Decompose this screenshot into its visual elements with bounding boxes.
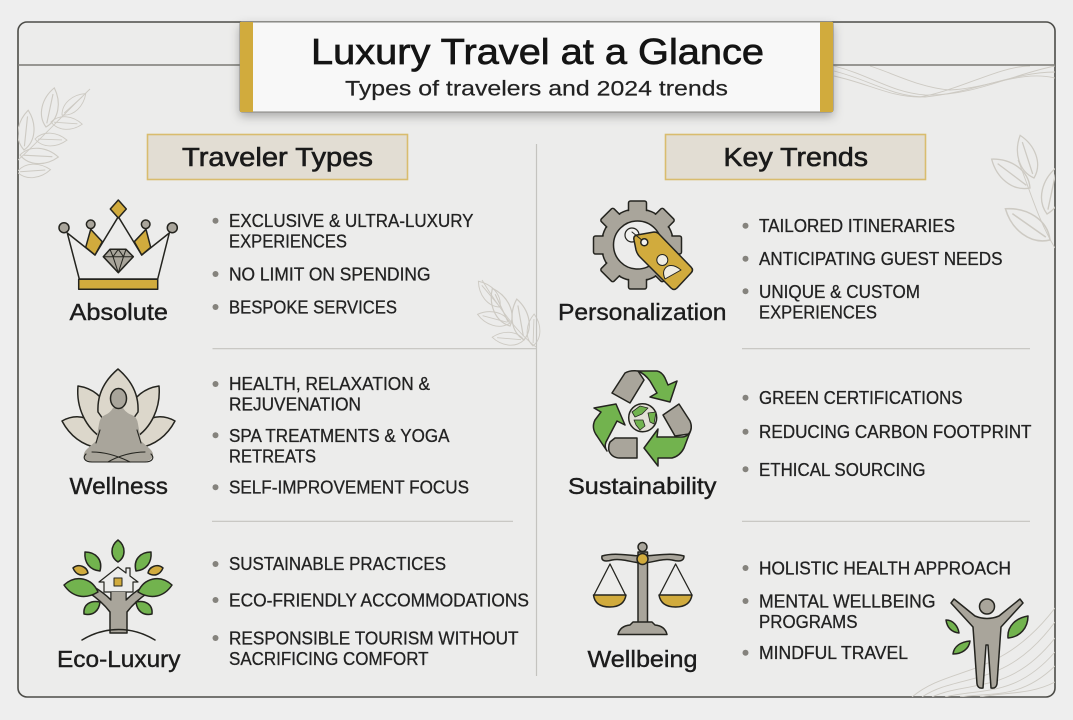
- label: Wellbeing: [588, 646, 698, 672]
- bullet list: REDUCING CARBON FOOTPRINT: [759, 422, 1032, 442]
- bullet list: SUSTAINABLE PRACTICES: [229, 554, 446, 574]
- panel: Wellness: [62, 369, 469, 499]
- bullet list: MINDFUL TRAVEL: [759, 643, 908, 663]
- decoration: top-left branch: [16, 86, 90, 179]
- bullet list: BESPOKE SERVICES: [229, 297, 397, 317]
- icon: person with leaves: [946, 599, 1028, 688]
- heading: Key Trends: [666, 134, 926, 180]
- header rule: [18, 64, 1055, 66]
- bullet list: ETHICAL SOURCING: [759, 460, 926, 480]
- decoration: bottom-right waves: [912, 608, 1055, 697]
- icon: tree house: [64, 540, 172, 640]
- panel: Absolute: [59, 200, 474, 325]
- title: Luxury Travel at a Glance: [311, 31, 764, 72]
- bullet list: [742, 388, 1032, 480]
- panel: Eco-Luxury: [57, 540, 529, 672]
- panel: Personalization: [558, 201, 1002, 325]
- icon: crown: [59, 200, 177, 289]
- bullet list: NO LIMIT ON SPENDING: [229, 264, 430, 284]
- decoration: top-right waves: [834, 66, 1055, 97]
- bullet list: TAILORED ITINERARIES: [759, 216, 955, 236]
- bullet list: [742, 558, 1011, 663]
- icon: balance scale: [594, 542, 692, 634]
- subtitle: Types of travelers and 2024 trends: [345, 76, 728, 100]
- bullet list: GREEN CERTIFICATIONS: [759, 388, 962, 408]
- panel: Wellbeing: [588, 542, 1028, 688]
- bullet list: ANTICIPATING GUEST NEEDS: [759, 249, 1002, 269]
- bullet list: REJUVENATION: [229, 394, 361, 414]
- bullet list: UNIQUE & CUSTOM: [759, 282, 920, 302]
- heading: Traveler Types: [148, 134, 408, 180]
- icon: gear and tag: [594, 201, 692, 290]
- label: Absolute: [70, 299, 168, 325]
- bullet list: [742, 216, 1002, 322]
- bullet list: [212, 374, 469, 497]
- bullet list: RESPONSIBLE TOURISM WITHOUT: [229, 628, 519, 648]
- panel: Sustainability: [568, 371, 1032, 499]
- bullet list: HEALTH, RELAXATION &: [229, 374, 430, 394]
- title banner: [240, 22, 833, 112]
- bullet list: PROGRAMS: [759, 612, 858, 632]
- label: Sustainability: [568, 473, 717, 499]
- heading: Traveler Types: Traveler Types: [182, 144, 373, 172]
- bullet list: SPA TREATMENTS & YOGA: [229, 426, 450, 446]
- icon: lotus meditation: [62, 369, 175, 462]
- bullet list: EXPERIENCES: [759, 302, 877, 322]
- label: Wellness: [70, 473, 168, 499]
- label: Personalization: [558, 299, 726, 325]
- icon: recycle and globe: [593, 371, 691, 466]
- bullet list: RETREATS: [229, 446, 316, 466]
- label: Eco-Luxury: [57, 646, 181, 672]
- decoration: right branch: [990, 134, 1055, 248]
- bullet list: EXPERIENCES: [229, 231, 347, 251]
- bullet list: EXCLUSIVE & ULTRA-LUXURY: [229, 211, 474, 231]
- decoration: centre branch: [473, 277, 540, 347]
- bullet list: MENTAL WELLBEING: [759, 591, 936, 611]
- heading: Key Trends: Key Trends: [724, 144, 868, 172]
- bullet list: SACRIFICING COMFORT: [229, 649, 428, 669]
- bullet list: [212, 211, 474, 317]
- bullet list: [212, 554, 529, 669]
- bullet list: SELF-IMPROVEMENT FOCUS: [229, 477, 469, 497]
- bullet list: ECO-FRIENDLY ACCOMMODATIONS: [229, 590, 529, 610]
- bullet list: HOLISTIC HEALTH APPROACH: [759, 558, 1011, 578]
